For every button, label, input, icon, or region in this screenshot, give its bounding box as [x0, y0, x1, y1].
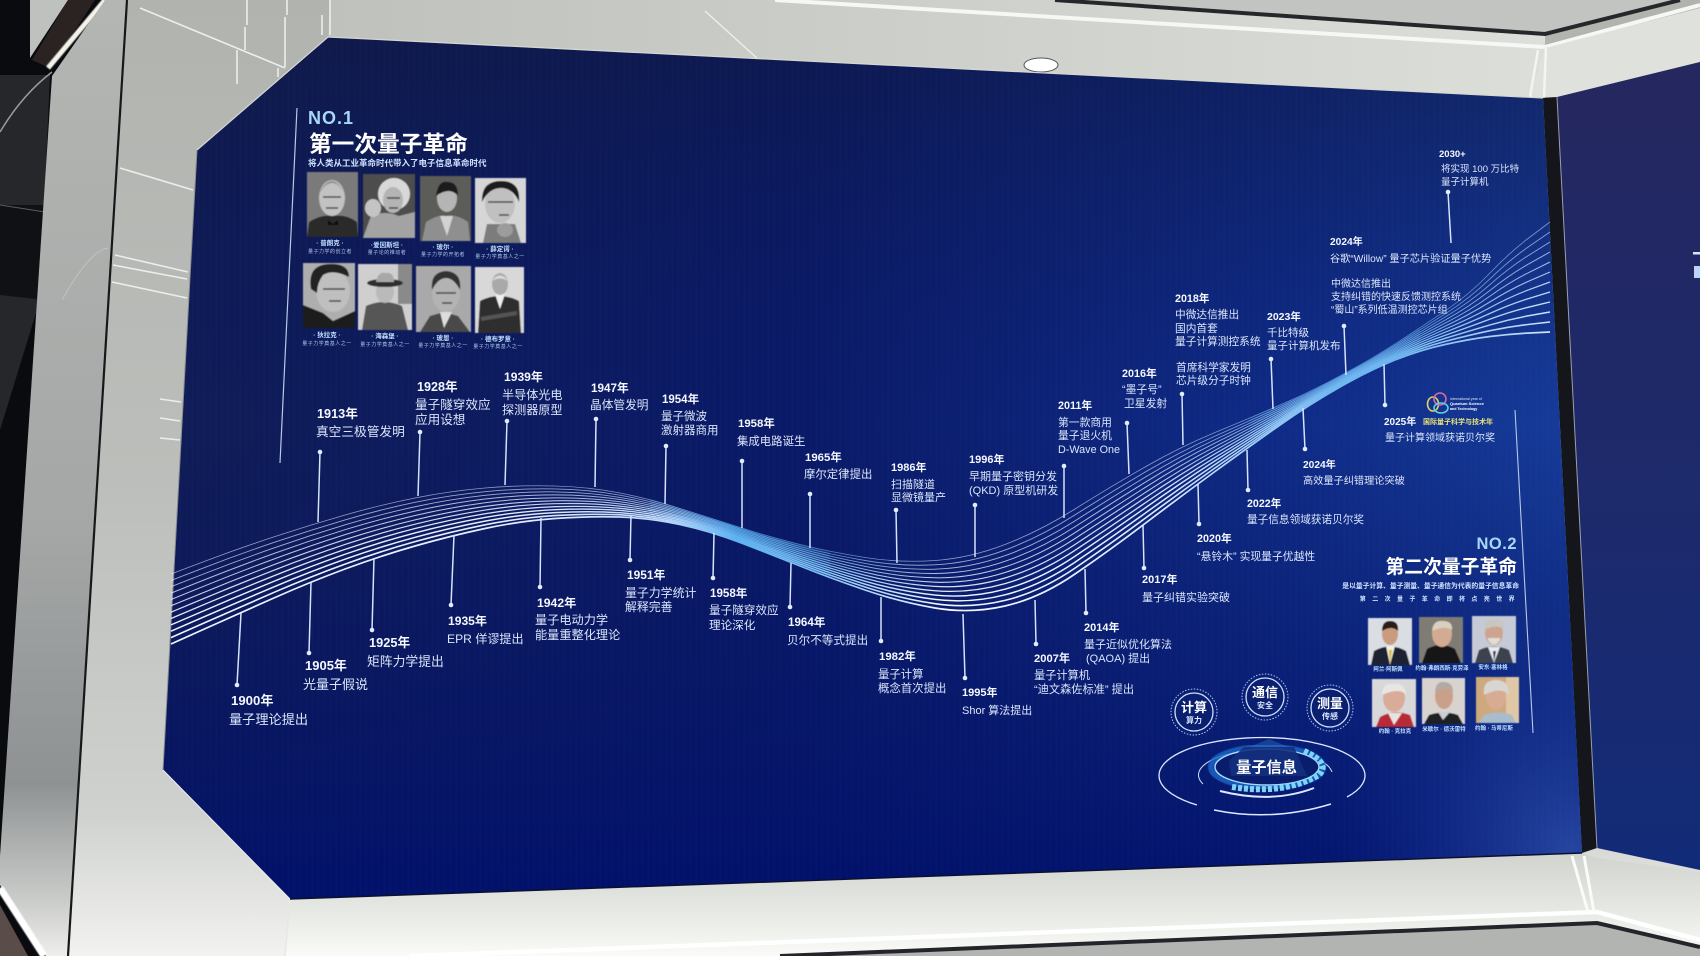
milestone 1982: 量子计算 [878, 667, 924, 681]
milestone 2014 [1084, 569, 1172, 665]
milestone 2014: (QAOA) 提出 [1086, 651, 1150, 665]
portrait: Martinis [1476, 677, 1519, 723]
milestone 1942: 量子电动力学 [535, 612, 608, 627]
milestone 2030+: 2030+ [1439, 149, 1466, 160]
top frame [328, 0, 1545, 98]
portrait captions: 约翰·弗朗西斯·克劳泽 [1415, 664, 1469, 672]
milestone 1982 [878, 597, 946, 695]
portrait captions: 量子力学奠基人之一 [473, 343, 523, 350]
milestone 1965: 摩尔定律提出 [804, 467, 872, 481]
milestone molecular clock [1176, 361, 1251, 445]
milestone 1958 tunnelling: 1958年 [710, 586, 748, 600]
milestone 1958 tunnelling: 量子隧穿效应 [709, 603, 779, 617]
milestone 2017: 量子纠错实验突破 [1142, 590, 1230, 604]
milestone 1996 [969, 452, 1058, 557]
milestone 2014: 量子近似优化算法 [1084, 637, 1172, 651]
milestone 1986: 扫描隧道 [891, 477, 935, 491]
milestone 1954: 量子微波 [661, 409, 707, 423]
portrait captions: 约翰 · 克拉克 [1379, 727, 1412, 735]
portrait captions [1373, 663, 1513, 735]
milestone 1942: 能量重整化理论 [535, 627, 620, 642]
portrait: Clarke [1372, 679, 1416, 727]
milestone 2024 error correction: 高效量子纠错理论突破 [1303, 474, 1405, 487]
milestone 1996: 1996年 [969, 452, 1004, 466]
portrait: Born [416, 266, 471, 332]
tagline: 第二次量子革命即将点亮世界 [1360, 595, 1521, 603]
milestone 1913 [316, 406, 405, 522]
milestone 2020: “悬铃木” 实现量子优越性 [1197, 549, 1315, 563]
milestone 1954 [661, 392, 718, 504]
milestone 1954: 激射器商用 [661, 423, 718, 437]
milestone 2014: 2014年 [1084, 620, 1119, 634]
milestone 1965 [804, 450, 872, 548]
milestone 1905: 光量子假说 [303, 677, 368, 692]
milestone 1942: 1942年 [537, 595, 576, 610]
dark corner strip [1543, 97, 1597, 853]
milestone 1958 integrated circuit [737, 416, 805, 528]
milestone 1995 [962, 614, 1032, 717]
section 2 header: NO.2 second quantum revolution [1342, 410, 1533, 733]
milestone 1939: 探测器原型 [502, 403, 562, 417]
heading label: NO.2 [1476, 535, 1517, 553]
milestone 1954: 1954年 [662, 392, 700, 406]
milestone 2023: 2023年 [1267, 310, 1301, 323]
milestone 1986: 显微镜量产 [891, 490, 946, 504]
milestone 1951: 解释完善 [625, 600, 673, 614]
milestone 1935: 1935年 [448, 613, 487, 628]
milestone 1935: EPR 佯谬提出 [447, 631, 524, 646]
milestone 1939: 半导体光电 [502, 388, 562, 402]
milestone Shushan chips: 中微达信推出 [1331, 277, 1391, 290]
milestone 1939: 1939年 [504, 369, 543, 384]
milestone 1951: 量子力学统计 [625, 586, 696, 600]
milestone 2007: 量子计算机 [1034, 668, 1090, 682]
milestone 2016 [1122, 366, 1167, 474]
portrait: de Broglie [475, 267, 524, 333]
portrait: Zeilinger [1472, 616, 1516, 663]
milestone 2022: 2022年 [1247, 497, 1282, 510]
milestone 1935 [447, 535, 524, 646]
left pillar [0, 0, 127, 956]
milestone 1928: 应用设想 [415, 412, 465, 427]
milestone 2025: 2025年 [1384, 415, 1416, 428]
badge: computing [1171, 689, 1217, 735]
milestone 1925 [367, 558, 444, 669]
milestone 2011 [1058, 398, 1120, 518]
milestone 1925: 矩阵力学提出 [367, 654, 444, 669]
milestone 2011: 量子退火机 [1058, 428, 1112, 442]
milestone 2024 Willow: 2024年 [1330, 235, 1363, 248]
milestone 2024 Willow: 谷歌“Willow” 量子芯片验证量子优势 [1330, 252, 1491, 265]
milestone 2020: 2020年 [1197, 531, 1232, 545]
milestone 1913: 1913年 [317, 406, 358, 421]
milestone 2025: 量子计算领域获诺贝尔奖 [1385, 431, 1495, 444]
International Year of Quantum logo: International year of [1450, 397, 1482, 401]
segmented ring [1232, 751, 1323, 789]
portrait captions: 量子力学的创立者 [308, 248, 352, 255]
milestone 2011: D-Wave One [1058, 444, 1120, 456]
milestone 2011: 2011年 [1058, 398, 1092, 412]
milestone 1982: 1982年 [879, 649, 916, 663]
portrait: Heisenberg [358, 264, 412, 330]
portrait captions: · 薛定谔 · [486, 244, 514, 253]
portrait captions: 约翰 · 马蒂尼斯 [1475, 724, 1513, 732]
portrait grid: second revolution [1368, 616, 1519, 735]
milestone 2022 [1246, 450, 1364, 526]
milestone 2017 [1142, 525, 1230, 604]
milestone 2030+: 量子计算机 [1441, 176, 1489, 188]
milestone 1964: 贝尔不等式提出 [787, 633, 868, 647]
milestone molecular clock: 芯片级分子时钟 [1176, 374, 1251, 387]
milestone 2024 error correction [1303, 408, 1405, 487]
portrait: Schrodinger [475, 178, 526, 243]
milestone molecular clock: 首席科学家发明 [1176, 361, 1251, 374]
milestone 1996: 早期量子密钥分发 [969, 469, 1057, 483]
main panel background [163, 37, 1582, 899]
section 1 header: NO.1 first quantum revolution [280, 108, 487, 463]
portrait captions: 量子力学奠基人之一 [418, 342, 468, 349]
milestone 2023 [1267, 310, 1340, 409]
right wall panel [1557, 62, 1700, 870]
milestone 1965: 1965年 [805, 450, 842, 464]
wall seams [112, 0, 330, 440]
milestone 1947: 晶体管发明 [590, 398, 648, 412]
portrait captions: · 海森堡 · [371, 331, 399, 340]
bottom frame [285, 853, 1700, 956]
International Year of Quantum logo: Quantum Science [1450, 401, 1485, 406]
milestone 1947 [590, 381, 648, 487]
portrait: Dirac [303, 263, 355, 328]
ceiling spotlight [1024, 58, 1058, 72]
milestone 1995: Shor 算法提出 [962, 703, 1032, 717]
quantum information core [1159, 738, 1365, 815]
heading label: NO.1 [308, 108, 354, 128]
International Year of Quantum logo [1423, 393, 1493, 426]
milestone 2016: 2016年 [1122, 366, 1157, 380]
milestone 2023: 量子计算机发布 [1267, 339, 1340, 352]
milestone 2022: 量子信息领域获诺贝尔奖 [1247, 513, 1364, 526]
milestone 2030+: 将实现 100 万比特 [1441, 163, 1520, 175]
milestone 1900: 量子理论提出 [229, 712, 308, 727]
portrait captions: · 普朗克 · [316, 238, 344, 247]
portrait captions: · 玻尔 · [433, 242, 453, 251]
portrait grid: first revolution [302, 172, 526, 350]
milestone 1958 tunnelling [709, 533, 779, 632]
badge: measurement [1307, 685, 1353, 731]
milestone 2023: 千比特级 [1267, 326, 1309, 339]
label: 量子信息 [1236, 758, 1297, 776]
milestone 1942 [535, 518, 620, 642]
portrait captions: 安东·塞林格 [1478, 663, 1508, 671]
badge: measurement: 测量 [1317, 696, 1343, 711]
milestone 1958 integrated circuit: 1958年 [738, 416, 775, 430]
milestone 2025 [1383, 364, 1495, 444]
portrait captions: 阿兰·阿斯佩 [1373, 665, 1403, 673]
milestone 1913: 真空三极管发明 [316, 424, 405, 439]
milestone 2030+ [1439, 149, 1520, 243]
badge: communication: 通信 [1252, 685, 1278, 700]
portrait captions: · 玻恩 · [433, 333, 453, 342]
heading: 第一次量子革命 [309, 131, 468, 157]
subheading: 将人类从工业革命时代带入了电子信息革命时代 [308, 158, 487, 168]
portrait captions: 米歇尔 · 德沃雷特 [1422, 725, 1466, 733]
milestone 2007: “迪文森佐标准” 提出 [1034, 682, 1134, 696]
milestone 1925: 1925年 [369, 635, 410, 650]
milestone 2024 Willow [1330, 235, 1491, 265]
portrait captions: · 德布罗意 · [481, 334, 515, 343]
milestone 2018: 国内首套 [1175, 322, 1218, 335]
portrait: Clauser [1419, 617, 1463, 663]
milestone 1951 [625, 515, 696, 614]
badge: measurement: 传感 [1322, 711, 1338, 721]
portrait: Aspect [1368, 618, 1412, 665]
milestone 2018: 量子计算测控系统 [1175, 335, 1261, 348]
milestone 1982: 概念首次提出 [878, 681, 946, 695]
milestone 2018: 中微达信推出 [1175, 308, 1239, 321]
milestone 1928 [415, 379, 491, 496]
subheading: 是以量子计算、量子测量、量子通信为代表的量子信息革命 [1342, 581, 1519, 590]
milestone 1939 [502, 369, 562, 485]
heading: 第二次量子革命 [1386, 555, 1517, 577]
portrait captions: · 狄拉克 · [313, 330, 341, 339]
milestone Shushan chips: 支持纠错的快速反馈测控系统 [1331, 290, 1461, 303]
milestone 1951: 1951年 [627, 568, 665, 582]
milestone 2016: “墨子号” [1122, 383, 1162, 396]
milestone 1964: 1964年 [788, 615, 826, 629]
milestone 2017: 2017年 [1142, 572, 1177, 586]
quantum timeline ribbon [171, 222, 1550, 644]
milestone 2018 [1175, 292, 1261, 348]
milestone 1958 tunnelling: 理论深化 [709, 618, 756, 632]
milestone 1958 integrated circuit: 集成电路诞生 [737, 434, 805, 448]
milestone 1964 [787, 563, 868, 647]
portrait captions: ·爱因斯坦 · [371, 240, 403, 249]
International Year of Quantum logo: and Technology [1450, 407, 1477, 411]
milestone 2020 [1197, 484, 1315, 563]
milestone 2011: 第一款商用 [1058, 415, 1112, 429]
milestone 1928: 量子隧穿效应 [415, 397, 491, 412]
milestone 1995: 1995年 [962, 685, 997, 699]
badge: computing: 算力 [1186, 715, 1202, 725]
milestone 1905 [303, 582, 368, 692]
milestone 2007 [1034, 600, 1134, 696]
milestone Shushan chips [1331, 277, 1461, 375]
milestone 2018: 2018年 [1175, 292, 1210, 305]
milestone 1986 [891, 460, 946, 563]
portrait captions: 量子力学奠基人之一 [360, 341, 410, 348]
portrait captions: 量子力学奠基人之一 [302, 340, 352, 347]
portrait captions: 量子力学奠基人之一 [475, 253, 525, 260]
portrait: Bohr [420, 176, 471, 241]
badge: computing: 计算 [1181, 700, 1207, 715]
portrait captions: 量子力学的开拓者 [421, 251, 465, 258]
milestone Shushan chips: “蜀山”系列低温测控芯片组 [1331, 303, 1448, 316]
milestone 2007: 2007年 [1034, 651, 1070, 665]
milestone 2024 error correction: 2024年 [1303, 458, 1336, 471]
milestone 1928: 1928年 [417, 379, 458, 394]
portrait captions [302, 238, 525, 350]
milestone 1900: 1900年 [231, 692, 274, 708]
milestone 1947: 1947年 [591, 381, 629, 395]
milestone 2016: 卫星发射 [1124, 396, 1167, 410]
label: international year: 国际量子科学与技术年 [1423, 417, 1493, 426]
milestone 1986: 1986年 [891, 460, 926, 474]
milestone 1900 [229, 613, 308, 727]
portrait: Devoret [1422, 678, 1465, 724]
milestone 1905: 1905年 [305, 658, 347, 673]
badge: communication [1242, 674, 1288, 720]
badge: communication: 安全 [1257, 700, 1273, 710]
portrait captions: 量子论的推动者 [368, 249, 406, 256]
milestone 1996: (QKD) 原型机研发 [969, 483, 1058, 497]
portrait: Einstein [363, 174, 415, 238]
portrait: Planck [307, 172, 358, 237]
